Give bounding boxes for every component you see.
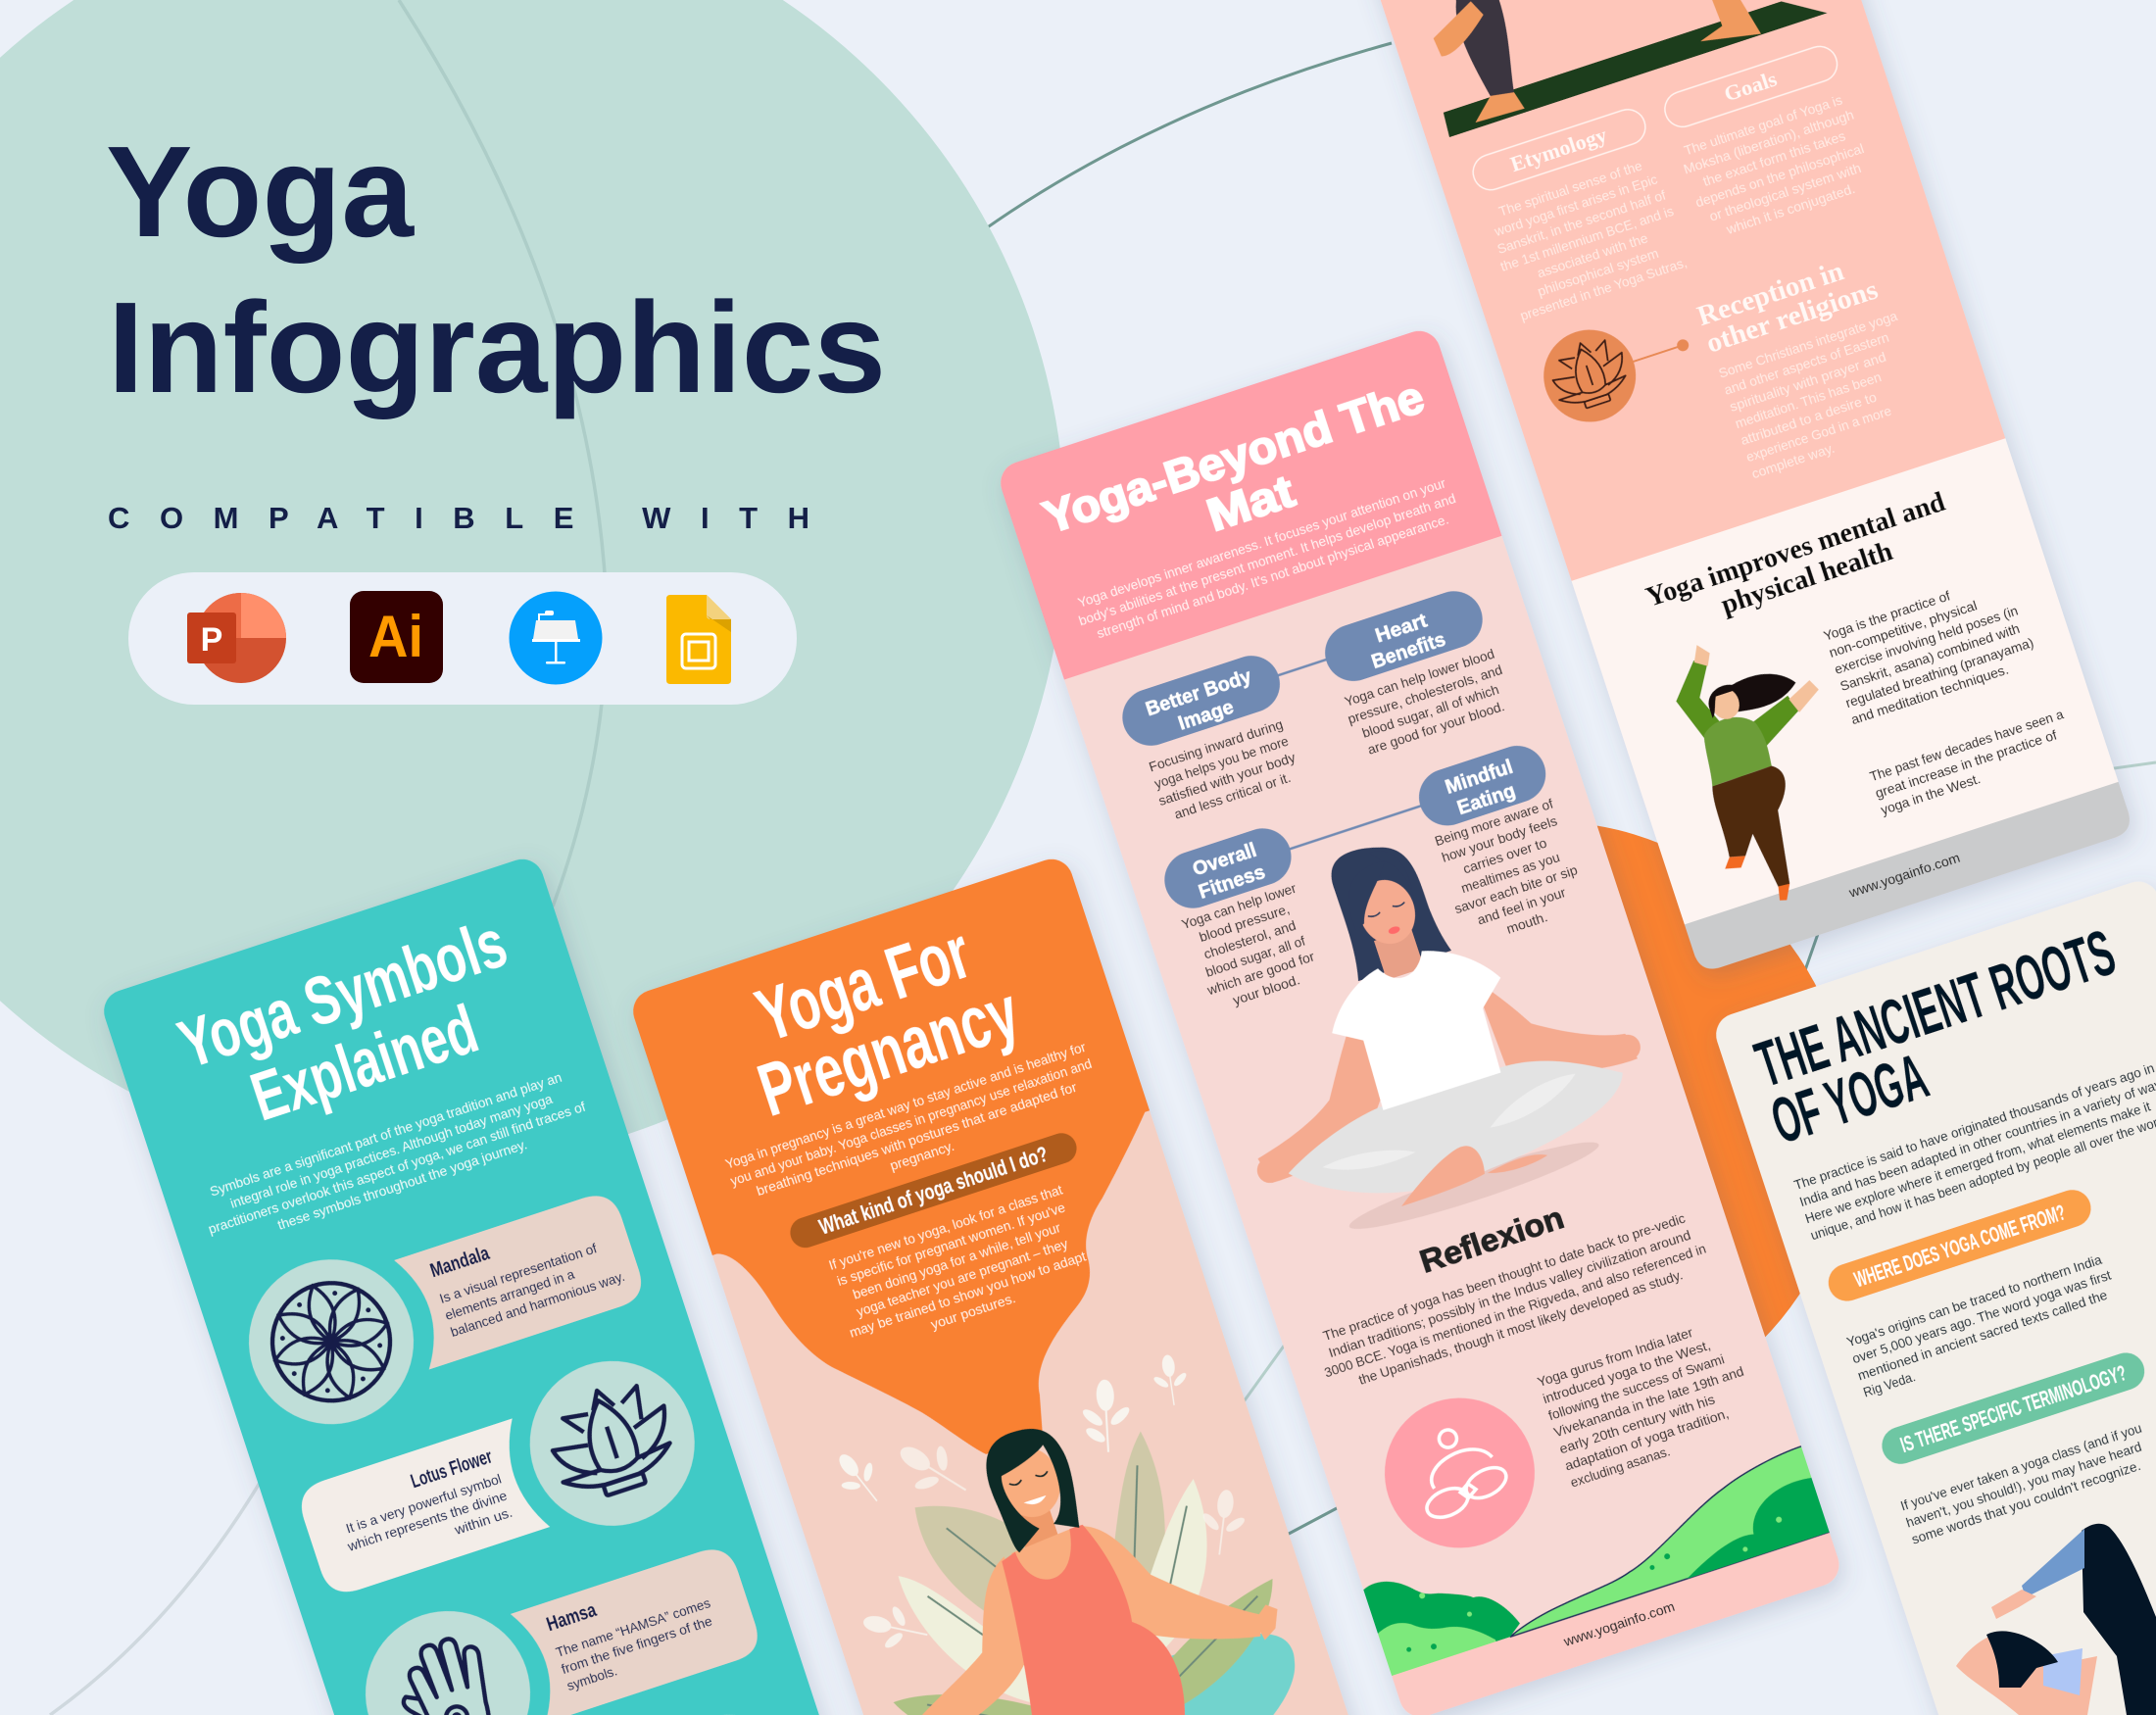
text: reception: experience God in a more [1744, 403, 1893, 465]
text: practice definition: exercise involving held poses (in [1833, 603, 2020, 677]
text: practice history: 3000 BCE. Yoga is mentioned in the Rigveda, and also referenced in [1322, 1241, 1708, 1381]
icon: PowerPoint: P [201, 621, 222, 659]
intro text: strength of mind and body. It's not about physical appearance. [1095, 511, 1450, 641]
text: reception: complete way. [1749, 440, 1837, 481]
text: etymology: The spiritual sense of the [1496, 158, 1644, 220]
pill: Mindful Eating: Eating [1454, 780, 1518, 819]
icon: next symbol circle [624, 1693, 832, 1715]
answer text: yoga teacher you are pregnant – they [855, 1236, 1070, 1319]
text: gurus: Yoga gurus from India later [1536, 1324, 1695, 1390]
text: heart benefits: are good for your blood. [1365, 698, 1506, 758]
header band [994, 324, 1502, 680]
text: overall fitness [1180, 885, 1313, 1007]
text: goals [1676, 89, 1878, 244]
text: practice history: The practice of yoga has been thought to date back to pre-vedic [1321, 1210, 1688, 1344]
callout: Lotus Flower: It is a very powerful symbol [344, 1471, 504, 1537]
text: heart benefits: pressure, cholesterols, and [1346, 662, 1504, 727]
text: practice definition: non-competitive, physical [1827, 597, 1979, 661]
pill: compatible software icons [128, 572, 797, 705]
orange circle [1241, 821, 1850, 1431]
heading: Reception in other religions: Reception in [1693, 255, 1847, 332]
intro text: Symbols are a significant part of the yoga tradition and play an [208, 1069, 564, 1200]
heading: Yoga improves: Yoga improves mental and [1642, 486, 1949, 613]
text: overall fitness: your blood. [1231, 971, 1301, 1008]
pill: where does yoga come from [1824, 1185, 2096, 1306]
text: reception: attributed to a desire to [1739, 389, 1879, 448]
intro text: pregnancy. [888, 1138, 956, 1173]
text: past decades: great increase in the practice of [1873, 727, 2059, 801]
illustration: meditating woman [1256, 847, 1641, 1229]
text: practice definition: Sanskrit, asana) combined with [1838, 620, 2022, 694]
illustration: hills and bushes [1361, 1443, 1831, 1676]
heading: Yoga improves: physical health [1717, 535, 1896, 620]
callout: Mandala: balanced and harmonious way. [449, 1268, 626, 1340]
intro text: Yoga in pregnancy is a great way to stay active and is healthy for [723, 1039, 1088, 1172]
text: etymology [1482, 153, 1692, 324]
footer band [1685, 782, 2134, 974]
panel: Yoga For Pregnancy [633, 858, 1359, 1715]
text: terminology: haven't, you should!), you may have heard [1904, 1439, 2143, 1531]
panel: Yoga-Beyond The Mat [994, 324, 1845, 1715]
callout: Hamsa: The name “HAMSA” comes [554, 1594, 712, 1660]
subheading pill: What kind of yoga should I do? [816, 1142, 1051, 1240]
text: mindful eating: savor each bite or sip [1452, 861, 1580, 916]
url: www.yogainfo.com [1846, 850, 1962, 901]
text: etymology: word yoga first arises in Epic [1492, 171, 1659, 239]
heading: Yoga-Beyond The [1037, 370, 1430, 543]
text: etymology: associated with the [1535, 229, 1650, 281]
illustration: dancing woman [1656, 613, 1878, 915]
heading: Reception in other religions: other religions [1702, 273, 1882, 360]
text: mindful eating [1435, 798, 1578, 934]
callout: Mandala: Is a visual representation of [437, 1240, 599, 1306]
title [106, 120, 886, 419]
intro text: practitioners overlook this aspect of yoga, we can still find traces of [206, 1099, 587, 1237]
orange blob [633, 858, 1150, 1454]
title: Infographics [108, 275, 886, 419]
intro text: you and your baby. Yoga classes in pregnancy use relaxation and [728, 1055, 1094, 1189]
heading [1744, 915, 2141, 1157]
pill: Etymology: Etymology [1507, 122, 1610, 176]
illustration: back-bend yoga pose [1956, 1524, 2156, 1715]
text: etymology: the 1st millennium BCE, and is [1498, 203, 1676, 274]
text: terminology: If you've ever taken a yoga class (and if you [1898, 1420, 2143, 1514]
answer text: your postures. [929, 1290, 1017, 1332]
heading: Reflexion: Reflexion [1415, 1200, 1568, 1280]
text: gurus: Vivekananda in the late 19th and [1551, 1363, 1745, 1440]
icon: Google Slides [666, 595, 731, 684]
icon: mandala [227, 1238, 435, 1446]
pill: Heart Benefits: Heart [1373, 611, 1430, 647]
pill: Better Body Image: Image [1176, 697, 1237, 735]
panel: Yoga Symbols Explained [98, 854, 948, 1715]
panel: The Ancient Roots of Yoga [1710, 876, 2156, 1715]
callout: Mandala: elements arranged in a [443, 1266, 576, 1323]
text: mindful eating: carries over to [1461, 835, 1549, 877]
background arcs behind cards [979, 43, 2156, 1542]
text: body image: Focusing inward during [1147, 716, 1285, 775]
text: heart benefits: blood sugar, all of which [1360, 681, 1500, 741]
answer text: is specific for pregnant women. If you've [835, 1200, 1067, 1289]
pill: Heart Benefits [1325, 591, 1483, 682]
text: mindful eating: Being more aware of [1433, 796, 1555, 849]
answer text [829, 1185, 1087, 1338]
text: practice definition [1822, 567, 2041, 727]
pill: Heart Benefits: Benefits [1369, 629, 1448, 673]
heading: Yoga For [747, 910, 980, 1058]
answer text: may be trained to show you how to adapt [848, 1249, 1088, 1341]
pill: Etymology [1468, 105, 1650, 194]
text: practice definition: regulated breathing (pranayama) [1843, 634, 2035, 710]
text: goals: Moksha (liberation), although [1682, 107, 1856, 177]
text: terminology: some words that you couldn't recognize. [1909, 1457, 2142, 1547]
answer text: been doing yoga for a while, tell your [851, 1219, 1062, 1302]
text: gurus: following the success of Swami [1546, 1350, 1726, 1423]
callout: Hamsa: from the five fingers of the [560, 1613, 714, 1677]
callout: Lotus Flower [294, 1418, 550, 1599]
answer text: If you're new to yoga, look for a class that [827, 1182, 1064, 1273]
text: etymology: presented in the Yoga Sutras, [1518, 254, 1689, 323]
large thin arc [50, 0, 607, 1715]
panel: Yoga improves mental and physical health [1290, 0, 2134, 974]
lower band [1572, 438, 2119, 924]
text: past decades: yoga in the West. [1879, 770, 1983, 817]
text: reception: Some Christians integrate yoga [1717, 308, 1899, 381]
pill: Better Body Image: Better Body [1144, 665, 1255, 720]
callout: Hamsa [510, 1543, 764, 1715]
text: overall fitness: Yoga can help lower [1180, 880, 1298, 932]
icon: PowerPoint [187, 593, 286, 683]
callout: Lotus Flower: which represents the divine [345, 1488, 509, 1554]
text: gurus: excluding asanas. [1568, 1443, 1672, 1491]
text: mindful eating: and feel in your [1475, 884, 1568, 928]
text: reception: spirituality with prayer and [1728, 349, 1887, 415]
text: practice definition: and meditation techniques. [1849, 662, 2010, 727]
pill: specific terminology [1877, 1348, 2149, 1469]
text: past decades: The past few decades have seen a [1868, 706, 2066, 784]
heading: Mat [1200, 465, 1300, 541]
text: gurus: early 20th century with his [1557, 1391, 1717, 1457]
intro text: Yoga develops inner awareness. It focuses your attention on your [1076, 474, 1447, 611]
text: body image [1149, 721, 1295, 819]
pill: Better Body Image [1122, 655, 1280, 747]
text: goals: the exact form this takes [1701, 127, 1847, 189]
intro text: body's abilities at the present moment. It helps develop breath and [1077, 490, 1457, 628]
icon: Illustrator [350, 591, 443, 683]
connectors [1278, 659, 1421, 851]
text: overall fitness: blood pressure, [1198, 901, 1292, 945]
heading: Pregnancy [749, 970, 1029, 1133]
text: reception: meditation. This has been [1733, 368, 1884, 431]
intro text: integral role in yoga practices. Although today many yoga [228, 1091, 555, 1211]
text: goals: The ultimate goal of Yoga is [1682, 91, 1844, 158]
text: origins [1844, 1250, 2124, 1400]
icon: hamsa [344, 1590, 552, 1715]
text: overall fitness: cholesterol, and [1201, 917, 1298, 962]
callout: Hamsa: Hamsa [544, 1599, 600, 1636]
pill: Overall Fitness: Overall [1190, 840, 1259, 881]
text: practice history: the Upanishads, though it most likely developed as study. [1356, 1266, 1685, 1388]
text: gurus: introduced yoga to the West, [1541, 1337, 1712, 1406]
text: etymology: philosophical system [1536, 245, 1660, 299]
text: overall fitness: which are good for [1204, 948, 1316, 999]
callout: Lotus Flower: Lotus Flower [409, 1446, 495, 1493]
pill: Mindful Eating: Mindful [1443, 757, 1515, 799]
title: Yoga [106, 120, 416, 264]
subtitle: COMPATIBLE WITH [108, 501, 809, 535]
illustration: yoga pose legs on mat [1402, 0, 1828, 137]
text: gurus: adaptation of yoga tradition, [1563, 1405, 1731, 1474]
mint circle [0, 0, 1065, 1166]
text: origins: Rig Veda. [1861, 1368, 1917, 1400]
intro text: breathing techniques with postures that are adapted for [755, 1079, 1079, 1199]
text: overall fitness: blood sugar, all of [1203, 933, 1307, 980]
icon: lotus with connector [1532, 300, 1703, 434]
text: heart benefits: Yoga can help lower blood [1343, 646, 1496, 710]
subheading pill [786, 1129, 1081, 1251]
heading: Yoga Symbols [170, 905, 515, 1083]
text: body image: satisfied with your body [1156, 749, 1298, 808]
callout: Mandala [393, 1189, 648, 1369]
text: body image: yoga helps you be more [1152, 733, 1291, 792]
text: origins: over 5,000 years ago. The word yoga was first [1850, 1267, 2113, 1366]
text: origins: mentioned in ancient sacred texts called the [1855, 1287, 2109, 1384]
heading: Explained [242, 990, 486, 1135]
text: goals: depends on the philosophical [1693, 140, 1866, 210]
heading: OF YOGA [1763, 1039, 1936, 1157]
heading [170, 905, 538, 1152]
heading [753, 936, 1014, 1116]
callout: Hamsa: symbols. [564, 1662, 619, 1693]
text: mindful eating: mealtimes as you [1459, 849, 1562, 896]
text: practice definition: Yoga is the practice of [1822, 587, 1952, 644]
icon: lotus [509, 1340, 716, 1547]
pill: Overall Fitness [1164, 828, 1292, 908]
text: mindful eating: how your body feels [1440, 812, 1559, 865]
text: reception [1717, 308, 1933, 481]
callout: Mandala: Mandala [427, 1243, 493, 1282]
icon: Illustrator: Ai [368, 604, 423, 669]
callout: Lotus Flower: within us. [452, 1504, 514, 1538]
text: reception: and other aspects of Eastern [1722, 329, 1890, 398]
text: etymology: Sanskrit, in the second half of [1495, 187, 1668, 257]
text: past decades [1868, 706, 2077, 817]
pill: Mindful Eating [1419, 745, 1546, 826]
illustration: meditating pregnant woman [839, 1354, 1296, 1715]
text: goals: which it is conjugated. [1724, 180, 1857, 237]
pill: Goals: Goals [1721, 66, 1781, 107]
text: body image: and less critical or it. [1172, 769, 1293, 822]
pill: Goals [1660, 42, 1841, 131]
text: origins: Yoga's origins can be traced to northern India [1844, 1251, 2104, 1349]
url: www.yogainfo.com [1561, 1598, 1677, 1649]
pill: Overall Fitness: Fitness [1196, 861, 1268, 904]
icon: meditation symbol [1384, 1397, 1535, 1548]
text: mindful eating: mouth. [1504, 908, 1549, 937]
bottom strip [1391, 1532, 1845, 1715]
intro text: these symbols throughout the yoga journey. [275, 1136, 529, 1233]
text: practice history: Indian traditions; possibly in the Indus valley civilization around [1327, 1227, 1692, 1360]
icon: Keynote [510, 592, 602, 684]
text: goals: or theological system with [1707, 160, 1863, 224]
text: gurus [1537, 1329, 1744, 1488]
text: heart benefits [1344, 649, 1505, 755]
